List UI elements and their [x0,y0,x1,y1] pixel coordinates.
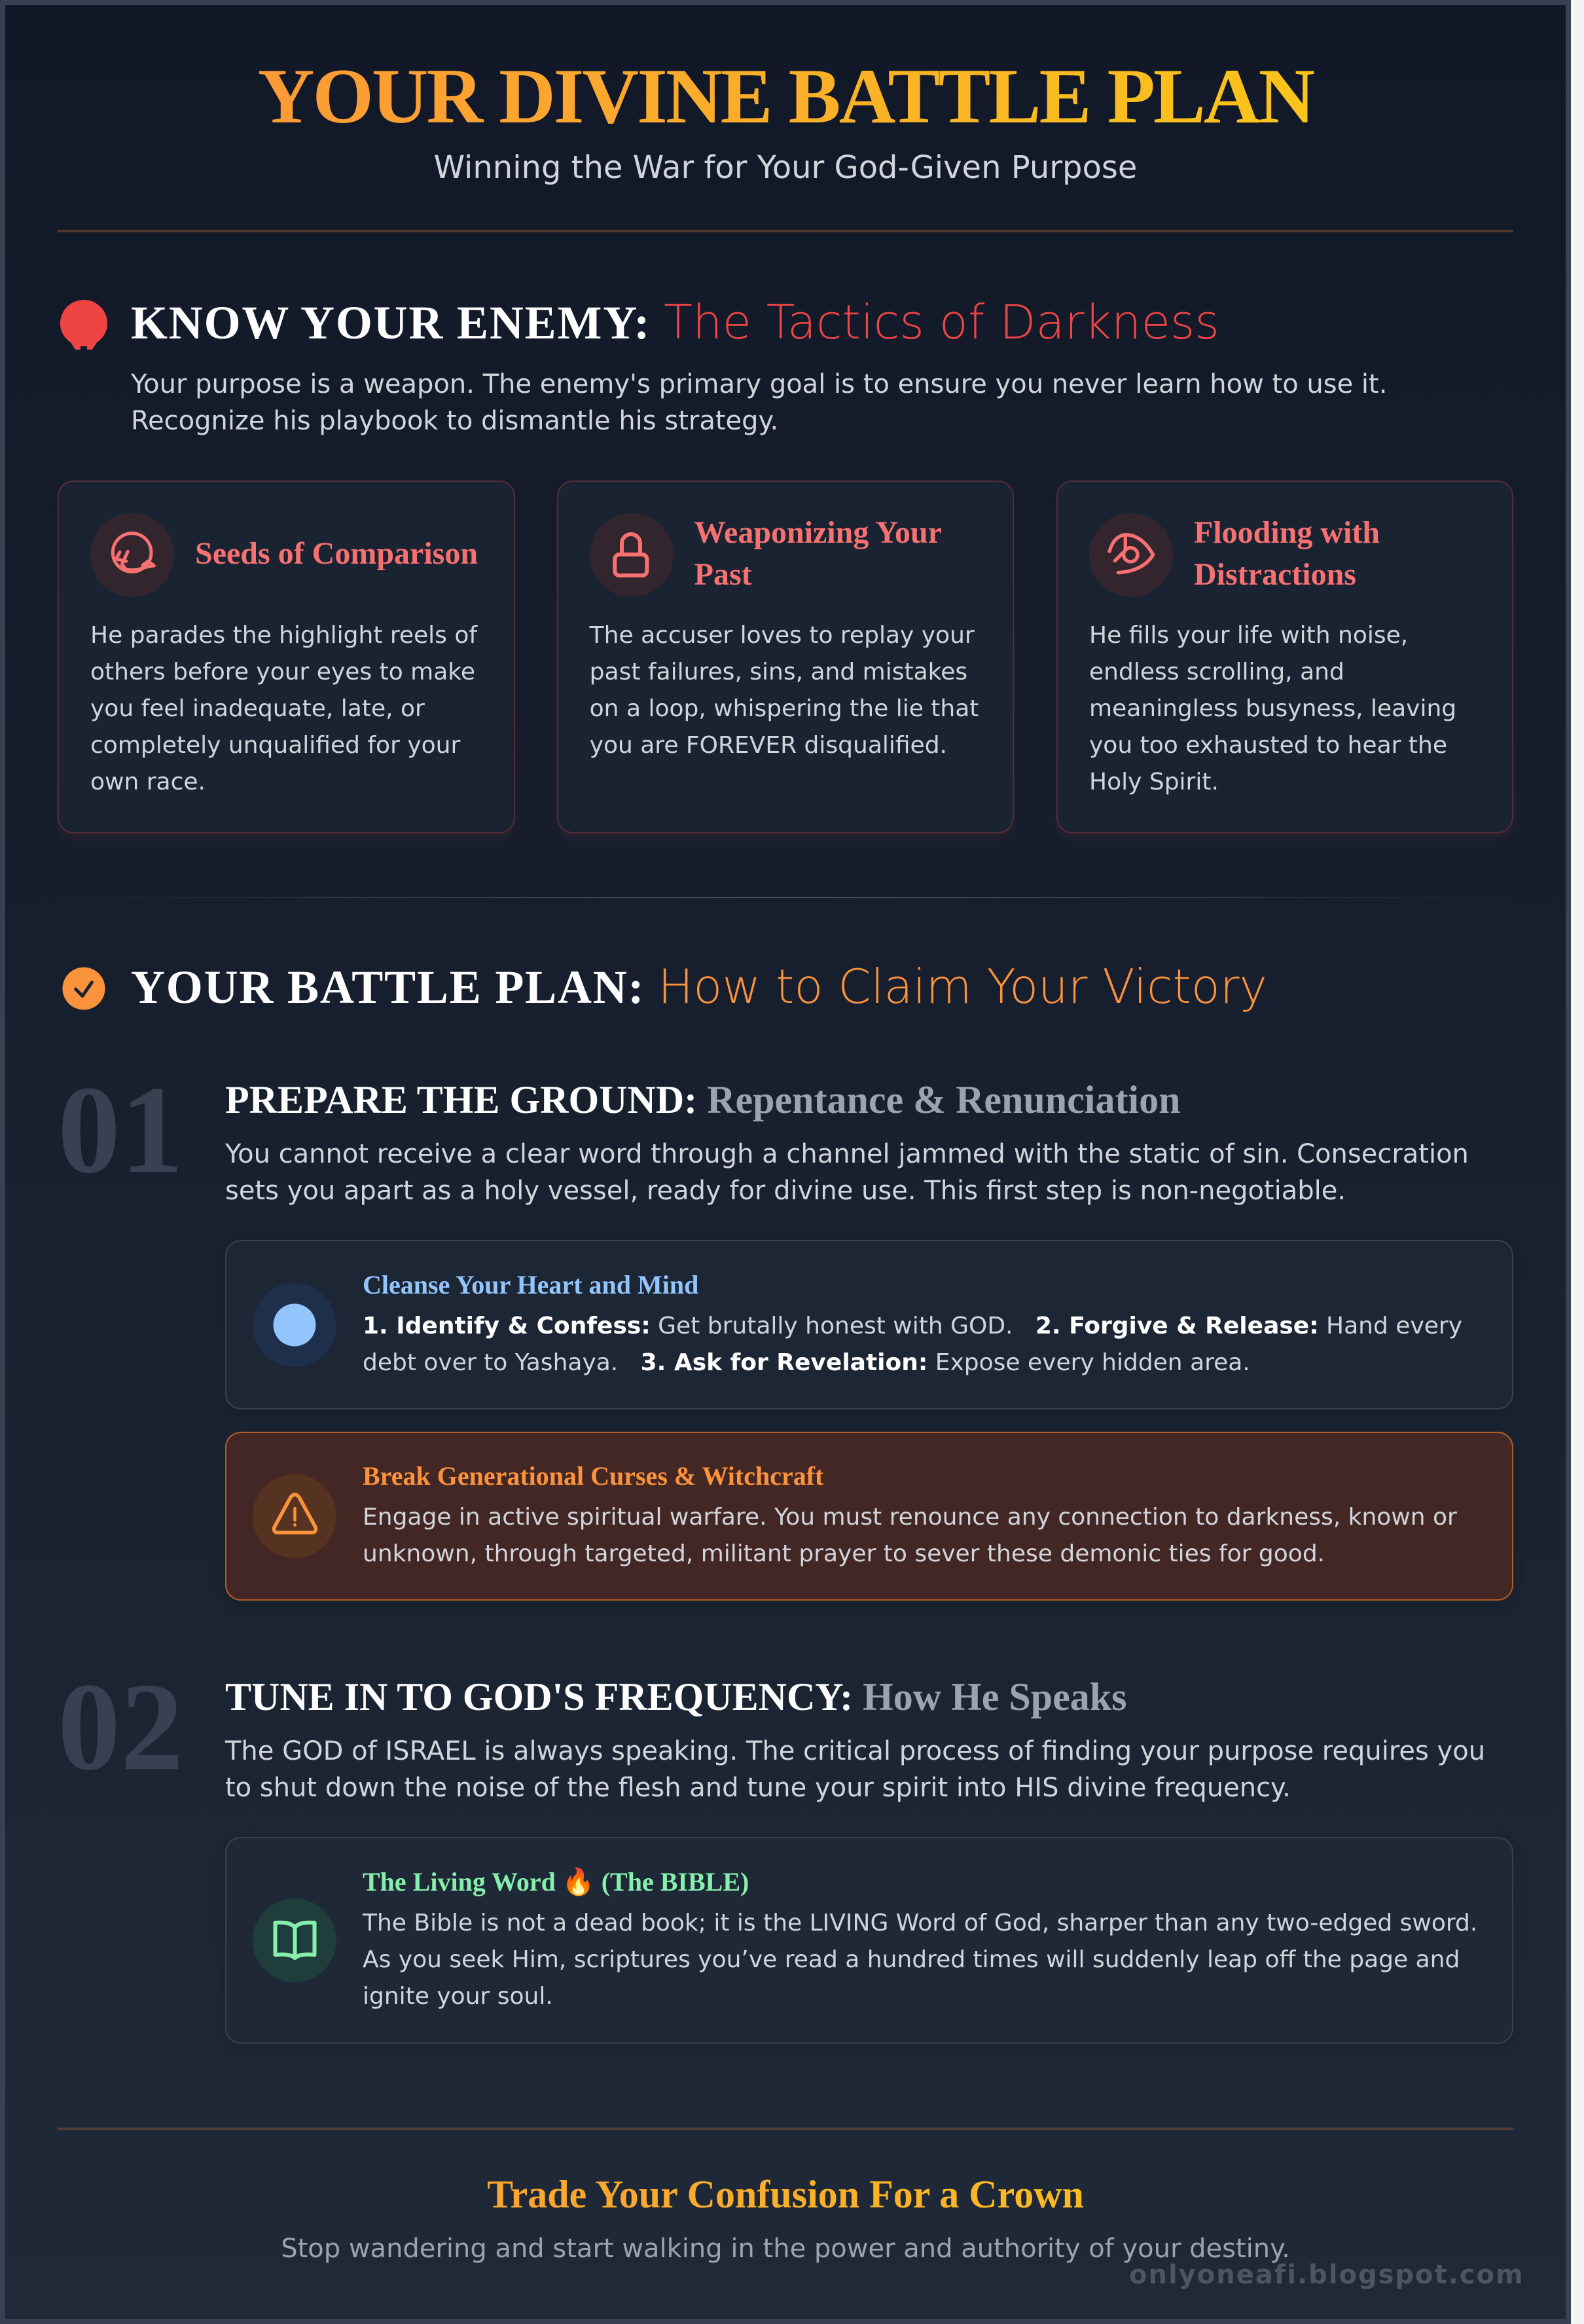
step 1 text [225,1139,1469,1206]
subtitle: Winning the War for Your God-Given Purpose [434,149,1137,186]
card title: Seeds of Comparison [195,536,478,571]
heading: your battle plan: YOUR BATTLE PLAN: How to Claim Your Victory [131,959,1267,1014]
panel: the living word [225,1837,1513,2044]
card text: endless scrolling, and [1089,659,1344,685]
icon: eye [1089,513,1173,597]
card title: Flooding with [1194,515,1380,550]
card text: you are FOREVER disqualified. [590,732,947,759]
step 1 text: sets you apart as a holy vessel, ready for divine use. This first step is non-negotiable. [225,1176,1346,1206]
card title: Past [694,557,752,592]
footer text: Stop wandering and start walking in the power and authority of your destiny. [281,2234,1290,2264]
sub card title: Cleanse Your Heart and Mind [363,1270,698,1299]
heading: know your enemy: KNOW YOUR ENEMY: The Tactics of Darkness [131,295,1219,350]
card text: you feel inadequate, late, or [90,695,425,722]
card text: He fills your life with noise, [1089,622,1408,649]
step 2 title: TUNE IN TO GOD'S FREQUENCY: How He Speaks [225,1675,1126,1718]
step 2 text: to shut down the noise of the flesh and tune your spirit into HIS divine frequency. [225,1773,1291,1803]
intro text: Recognize his playbook to dismantle his strategy. [131,406,778,436]
icon: helmet [90,513,174,597]
panel: flooding with distractions [1056,481,1513,833]
sub card text: unknown, through targeted, militant prayer to sever these demonic ties for good. [363,1540,1325,1567]
icon: blue dot [253,1283,336,1367]
title: YOUR DIVINE BATTLE PLAN [258,52,1313,139]
card title [1194,515,1380,592]
panel: break generational curses [225,1432,1513,1601]
panel: seeds of comparison [58,481,515,833]
card text: meaningless busyness, leaving [1089,695,1456,722]
sub card title: The Living Word 🔥 (The BIBLE) [363,1867,749,1896]
sub card text: Engage in active spiritual warfare. You must renounce any connection to darkness, known or [363,1503,1457,1531]
sub card text [363,1503,1457,1567]
icon: lock [590,513,674,597]
card text: own race. [90,769,206,795]
card text: past failures, sins, and mistakes [590,659,967,685]
card title: Distractions [1194,557,1356,592]
card text: The accuser loves to replay your [590,622,975,649]
step 1 text: You cannot receive a clear word through a channel jammed with the static of sin. Consecration [225,1139,1469,1169]
card text: others before your eyes to make [90,659,475,685]
sub card text: debt over to Yashaya. 3. Ask for Revelation: Expose every hidden area. [363,1349,1250,1376]
icon: check circle [63,968,105,1009]
watermark: onlyoneafi.blogspot.com [1129,2260,1524,2290]
icon: open book [253,1898,336,1982]
sub card text: As you seek Him, scriptures you’ve read a hundred times will suddenly leap off the page and [363,1946,1460,1973]
panel: weaponizing your past [557,481,1014,833]
card text: Holy Spirit. [1089,769,1219,795]
intro text [131,369,1387,436]
step 2 text: The GOD of ISRAEL is always speaking. The critical process of finding your purpose requires you [225,1736,1485,1766]
card text [90,622,478,795]
icon: enemy skull [60,300,107,350]
sub card text: The Bible is not a dead book; it is the LIVING Word of God, sharper than any two-edged sword. [363,1909,1477,1936]
number 01: 01 [58,1060,183,1199]
sub card text [363,1312,1462,1376]
footer title: Trade Your Confusion For a Crown [487,2173,1084,2216]
step 2 text [225,1736,1485,1803]
footer title [58,2171,1513,2218]
sub card text [363,1909,1477,2010]
sub card text: ignite your soul. [363,1982,553,2010]
card title: Weaponizing Your [694,515,942,550]
card text: on a loop, whispering the lie that [590,695,979,722]
intro text: Your purpose is a weapon. The enemy's primary goal is to ensure you never learn how to use it. [131,369,1387,399]
sub card text: 1. Identify & Confess: Get brutally honest with GOD. 2. Forgive & Release: Hand every [363,1312,1462,1339]
sub card title: Break Generational Curses & Witchcraft [363,1461,823,1490]
title [58,57,1513,136]
card title [694,515,942,592]
step 1 title: PREPARE THE GROUND: Repentance & Renunciation [225,1078,1180,1121]
card text: completely unqualified for your [90,732,460,759]
panel: cleanse your heart [225,1240,1513,1409]
icon: warning triangle [253,1474,336,1558]
card text: He parades the highlight reels of [90,622,477,649]
card text [589,622,979,759]
card text: you too exhausted to hear the [1089,732,1447,759]
number 02: 02 [58,1657,183,1796]
card text [1089,622,1456,795]
